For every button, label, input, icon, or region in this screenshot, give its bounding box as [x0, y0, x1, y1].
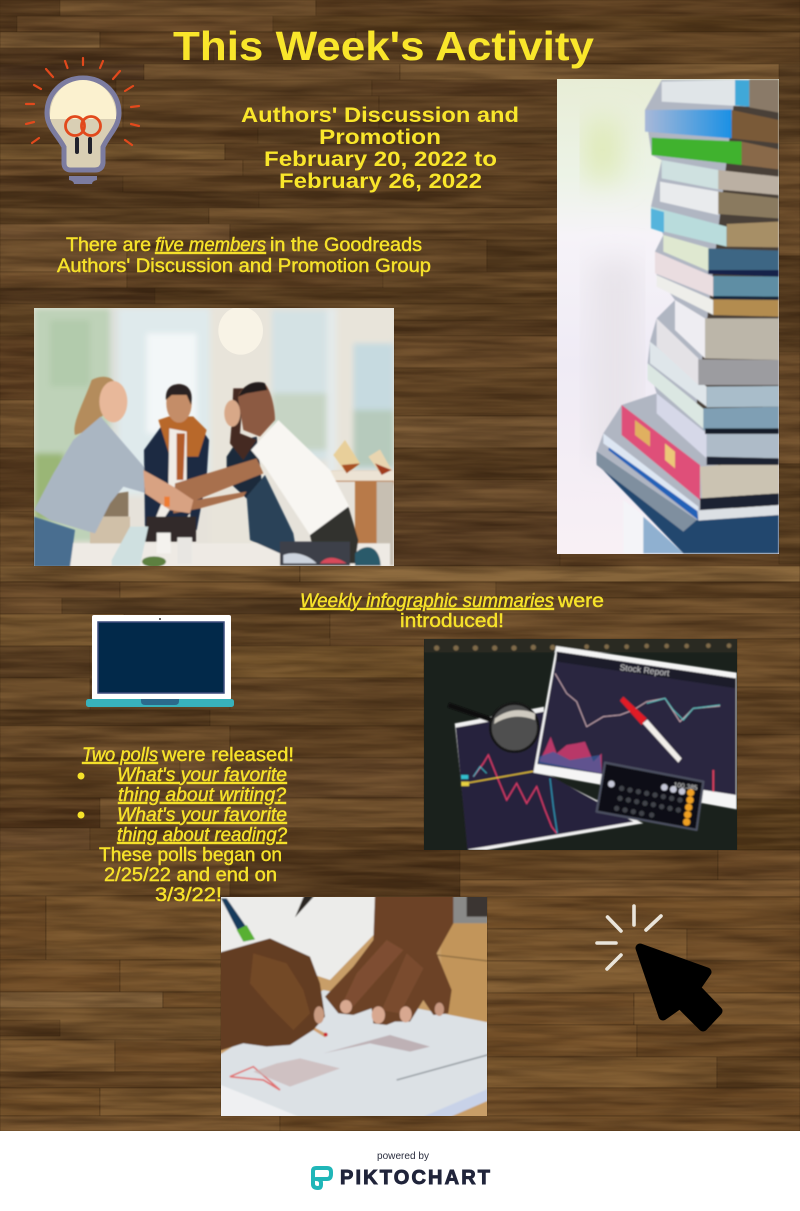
photo: stack of books: [557, 79, 779, 554]
text: polls list: Two polls: [82, 744, 158, 766]
photo: stock report charts: Stock Report: [619, 662, 671, 678]
title: This Week's Activity: [173, 23, 594, 69]
text: weekly infographic summaries: [300, 590, 604, 632]
subtitle: group name and dates: February 26, 2022: [279, 169, 482, 193]
icon: laptop: [86, 615, 234, 707]
text: polls list: 3/3/22!: [155, 884, 222, 906]
text: five members: Authors' Discussion and Promotion Group: [57, 255, 431, 277]
text: polls list: 2/25/22 and end on: [104, 864, 277, 886]
icon: light bulb: [26, 58, 139, 184]
photo: stock report charts: 100,385: [673, 782, 698, 792]
footer: powered by Piktochart: [0, 1131, 800, 1211]
photo: child writing in notebook: [217, 893, 493, 1120]
text: polls list: What's your favorite: [117, 804, 287, 826]
subtitle: group name and dates: Promotion: [319, 125, 441, 149]
photo: stock report charts: [424, 638, 737, 850]
footer text: powered by: [377, 1150, 430, 1162]
icon: cursor with click sparks: [597, 906, 718, 1027]
text: polls list: [78, 744, 294, 906]
subtitle: group name and dates: February 20, 2022 to: [264, 147, 497, 171]
text: five members: five members: [155, 234, 266, 256]
wordmark: PIKTOCHART: [340, 1167, 490, 1189]
text: polls list: What's your favorite: [117, 764, 287, 786]
text: five members: in the Goodreads: [270, 234, 422, 256]
text: polls list: thing about writing?: [118, 784, 286, 806]
text: five members: There are: [66, 234, 151, 256]
photo: team stacking hands: [34, 307, 394, 567]
text: polls list: thing about reading?: [117, 824, 287, 846]
subtitle: group name and dates: Authors' Discussion and: [241, 103, 519, 127]
text: weekly infographic summaries: were: [557, 590, 604, 612]
text: polls list: These polls began on: [99, 844, 282, 866]
text: polls list: were released!: [161, 744, 294, 766]
icon: Piktochart logo: [313, 1168, 331, 1188]
subtitle: group name and dates: [241, 103, 519, 193]
text: five members: [57, 234, 431, 277]
text: weekly infographic summaries: Weekly infographic summaries: [300, 590, 554, 612]
text: weekly infographic summaries: introduced!: [400, 610, 504, 632]
